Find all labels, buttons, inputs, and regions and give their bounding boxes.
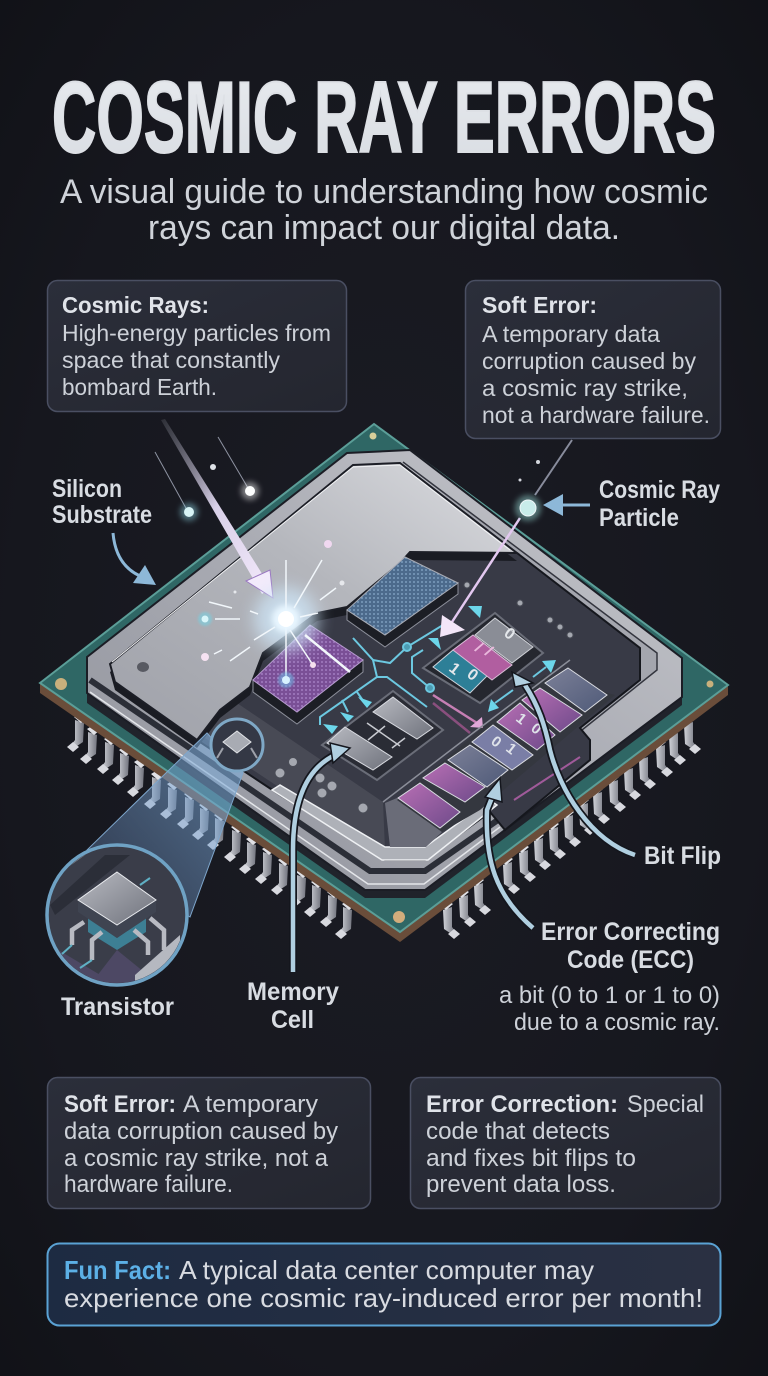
label: cosmic ray particle: Cosmic Ray	[599, 476, 720, 504]
label: silicon substrate	[52, 475, 152, 529]
arrow: cosmic ray particle label	[543, 494, 590, 516]
text: error correction body: code that detects	[426, 1118, 610, 1145]
text: bit flip definition: due to a cosmic ray.	[514, 1009, 720, 1036]
text: soft error body: not a hardware failure.	[482, 402, 710, 428]
memory cell strip: 1	[503, 740, 520, 758]
inner silver band	[272, 785, 497, 860]
metal lid	[87, 450, 682, 898]
text: soft error body: a cosmic ray strike,	[482, 375, 688, 401]
pins: right edge	[441, 716, 701, 939]
panel: soft error bottom	[48, 1078, 370, 1208]
bit flip memory block: 1	[446, 660, 463, 679]
text: soft error body	[482, 321, 710, 428]
text: bit flip definition	[499, 982, 720, 1036]
label: error correcting code	[541, 918, 720, 974]
circuit board	[40, 424, 728, 942]
bit flip memory block: 0	[464, 666, 481, 685]
text: fun fact body: A typical data center computer may	[179, 1255, 594, 1285]
memory cell strip: 0	[528, 720, 545, 738]
text: fun fact body: experience one cosmic ray-induced error per month!	[64, 1283, 703, 1313]
text: bit flip definition: a bit (0 to 1 or 1 to 0)	[499, 982, 720, 1009]
lower right traces	[514, 757, 580, 800]
main cosmic ray strike	[161, 419, 273, 598]
memory chips with contacts	[322, 691, 443, 780]
subtitle	[60, 173, 708, 247]
impact burst	[198, 540, 350, 688]
label: memory cell: Memory	[247, 978, 339, 1006]
arrow: memory cell label	[293, 743, 350, 972]
chip illustration	[40, 424, 728, 942]
label: error correcting code: Error Correcting	[541, 918, 720, 946]
heading: fun fact: Fun Fact:	[64, 1255, 171, 1285]
label: bit flip: Bit Flip	[644, 842, 721, 870]
circuit traces	[320, 606, 556, 734]
transistor magnified view	[47, 845, 187, 985]
stacked memory base	[385, 798, 442, 847]
panel: soft error top	[466, 280, 720, 438]
lid top plate	[110, 463, 517, 748]
text: soft error bottom body: hardware failure.	[64, 1171, 233, 1198]
text: soft error bottom body: a cosmic ray strike, not a	[64, 1145, 328, 1172]
small components	[275, 582, 573, 813]
heading: cosmic rays: Cosmic Rays:	[62, 292, 209, 318]
bit flip memory block: /	[472, 640, 486, 656]
lower left floor	[205, 703, 385, 850]
text: cosmic rays body: High-energy particles from	[62, 320, 331, 346]
purple processor chip	[253, 625, 363, 724]
heading: soft error bottom: Soft Error:	[64, 1091, 176, 1118]
text: error correction body: prevent data loss.	[426, 1171, 616, 1198]
transistor locator circle	[211, 719, 263, 771]
pink trace arrow	[433, 695, 483, 733]
incoming cosmic ray particle	[440, 440, 572, 637]
arrow: bit flip label	[512, 672, 635, 855]
arrow: silicon substrate label	[113, 533, 156, 585]
label: cosmic ray particle	[599, 476, 720, 532]
arrow: error correcting code label	[485, 778, 533, 928]
callout: fun fact	[48, 1244, 720, 1326]
text: soft error body: A temporary data	[482, 321, 660, 347]
secondary particles	[155, 437, 259, 521]
heading: soft error: Soft Error:	[482, 292, 597, 318]
label: error correcting code: Code (ECC)	[567, 946, 694, 974]
text: error correction body	[426, 1091, 704, 1198]
text: cosmic rays body	[62, 320, 331, 400]
bit flip memory block: 0	[501, 625, 518, 644]
text: soft error body: corruption caused by	[482, 348, 696, 374]
label: transistor: Transistor	[61, 993, 174, 1021]
memory cell strip	[383, 660, 615, 832]
panel: error correction	[410, 1078, 720, 1208]
memory cell strip: 1	[513, 710, 530, 728]
label: memory cell	[247, 978, 339, 1034]
text: cosmic rays body: space that constantly	[62, 347, 281, 373]
label: memory cell: Cell	[271, 1006, 314, 1034]
pins: left edge	[67, 714, 354, 939]
label: cosmic ray particle: Particle	[599, 504, 679, 532]
text: soft error bottom body: A temporary	[183, 1091, 319, 1118]
label: silicon substrate: Silicon	[52, 475, 122, 503]
text: soft error bottom body	[64, 1091, 339, 1198]
text: fun fact body	[64, 1255, 703, 1313]
text: soft error bottom body: data corruption caused by	[64, 1118, 339, 1145]
subtitle: A visual guide to understanding how cosmic	[60, 173, 708, 211]
memory cell strip: 0	[488, 733, 505, 751]
magnifier beam	[87, 733, 243, 917]
bit flip memory block	[423, 613, 543, 703]
label: silicon substrate: Substrate	[52, 501, 152, 529]
exposed circuit area	[197, 552, 640, 860]
bit flip memory block: /	[482, 644, 496, 660]
text: error correction body: and fixes bit flips to	[426, 1145, 636, 1172]
blue processor chip	[347, 557, 458, 647]
text: error correction body: Special	[627, 1091, 704, 1118]
text: cosmic rays body: bombard Earth.	[62, 374, 217, 400]
subtitle: rays can impact our digital data.	[148, 209, 620, 247]
panel: cosmic rays	[48, 280, 346, 412]
heading: error correction: Error Correction:	[426, 1091, 618, 1118]
